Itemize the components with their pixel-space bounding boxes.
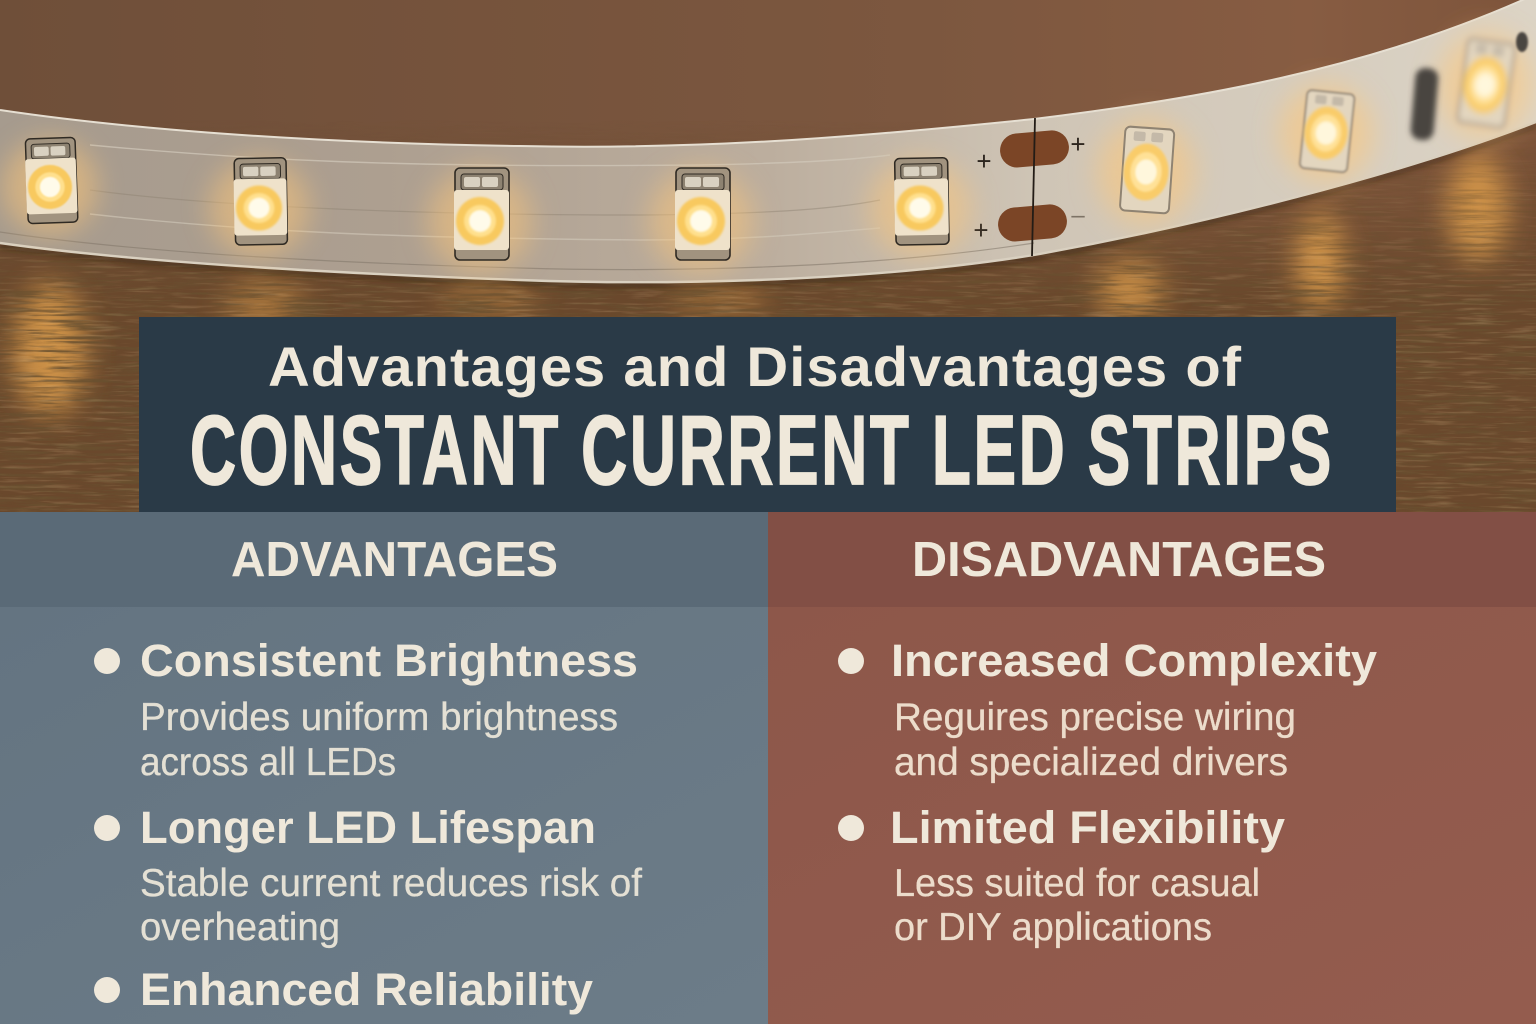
disadvantage item: limited flexibility: Less suited for casual xyxy=(894,862,1260,905)
disadvantage item: increased complexity: Reguires precise wiring xyxy=(894,696,1296,739)
advantage item: consistent brightness: Provides uniform brightness xyxy=(140,696,618,739)
wooden table background xyxy=(0,0,1536,512)
warm light reflections on the table xyxy=(14,154,1508,416)
advantage item: longer LED lifespan: overheating xyxy=(140,906,340,949)
advantage item: consistent brightness xyxy=(94,635,638,784)
advantages heading: ADVANTAGES xyxy=(231,533,558,587)
photo: LED strip on wooden table xyxy=(0,0,1536,512)
advantage item: consistent brightness: Consistent Brightness xyxy=(140,635,638,686)
dark chip component xyxy=(1410,67,1439,141)
disadvantage item: limited flexibility: or DIY applications xyxy=(894,906,1212,949)
LED 2 xyxy=(208,157,310,258)
solder pads and markings: + xyxy=(973,215,989,245)
advantage item: consistent brightness: across all LEDs xyxy=(140,741,396,784)
LED 4 xyxy=(649,168,753,273)
LED 8 xyxy=(1431,26,1536,144)
disadvantage item: increased complexity xyxy=(838,635,1377,784)
solder pads and markings: – xyxy=(1071,202,1085,229)
advantage item: longer LED lifespan: Stable current reduces risk of xyxy=(140,862,642,905)
disadvantage item: increased complexity: and specialized drivers xyxy=(894,741,1288,784)
disadvantage item: increased complexity: Increased Complexity xyxy=(891,635,1377,686)
advantage item: longer LED lifespan: Longer LED Lifespan xyxy=(140,802,596,853)
solder pads and markings: + xyxy=(976,146,992,176)
LED 3 xyxy=(428,168,532,273)
panel: disadvantages xyxy=(768,512,1536,1024)
disadvantage item: limited flexibility xyxy=(838,802,1285,949)
LED 6 xyxy=(1093,116,1199,228)
disadvantage item: limited flexibility: Limited Flexibility xyxy=(890,802,1285,853)
title line one: Advantages and Disadvantages of xyxy=(268,335,1242,398)
wood grain texture xyxy=(0,164,1536,512)
LED 7 xyxy=(1274,79,1378,187)
solder pads and markings: + xyxy=(1070,129,1086,159)
disadvantages header bar xyxy=(768,512,1536,607)
advantage item: enhanced reliability: Enhanced Reliability xyxy=(140,964,593,1015)
advantages header bar xyxy=(0,512,768,607)
small dark component xyxy=(1516,32,1528,52)
strip contact shadow xyxy=(0,125,1536,285)
panel: advantages xyxy=(0,512,768,1024)
disadvantages heading: DISADVANTAGES xyxy=(912,533,1326,587)
LED 1 xyxy=(0,137,99,236)
advantage item: longer LED lifespan xyxy=(94,802,642,949)
LED 5 xyxy=(868,157,972,258)
solder pads and markings xyxy=(973,118,1086,256)
flexible LED strip xyxy=(0,0,1536,282)
title banner xyxy=(139,317,1396,512)
